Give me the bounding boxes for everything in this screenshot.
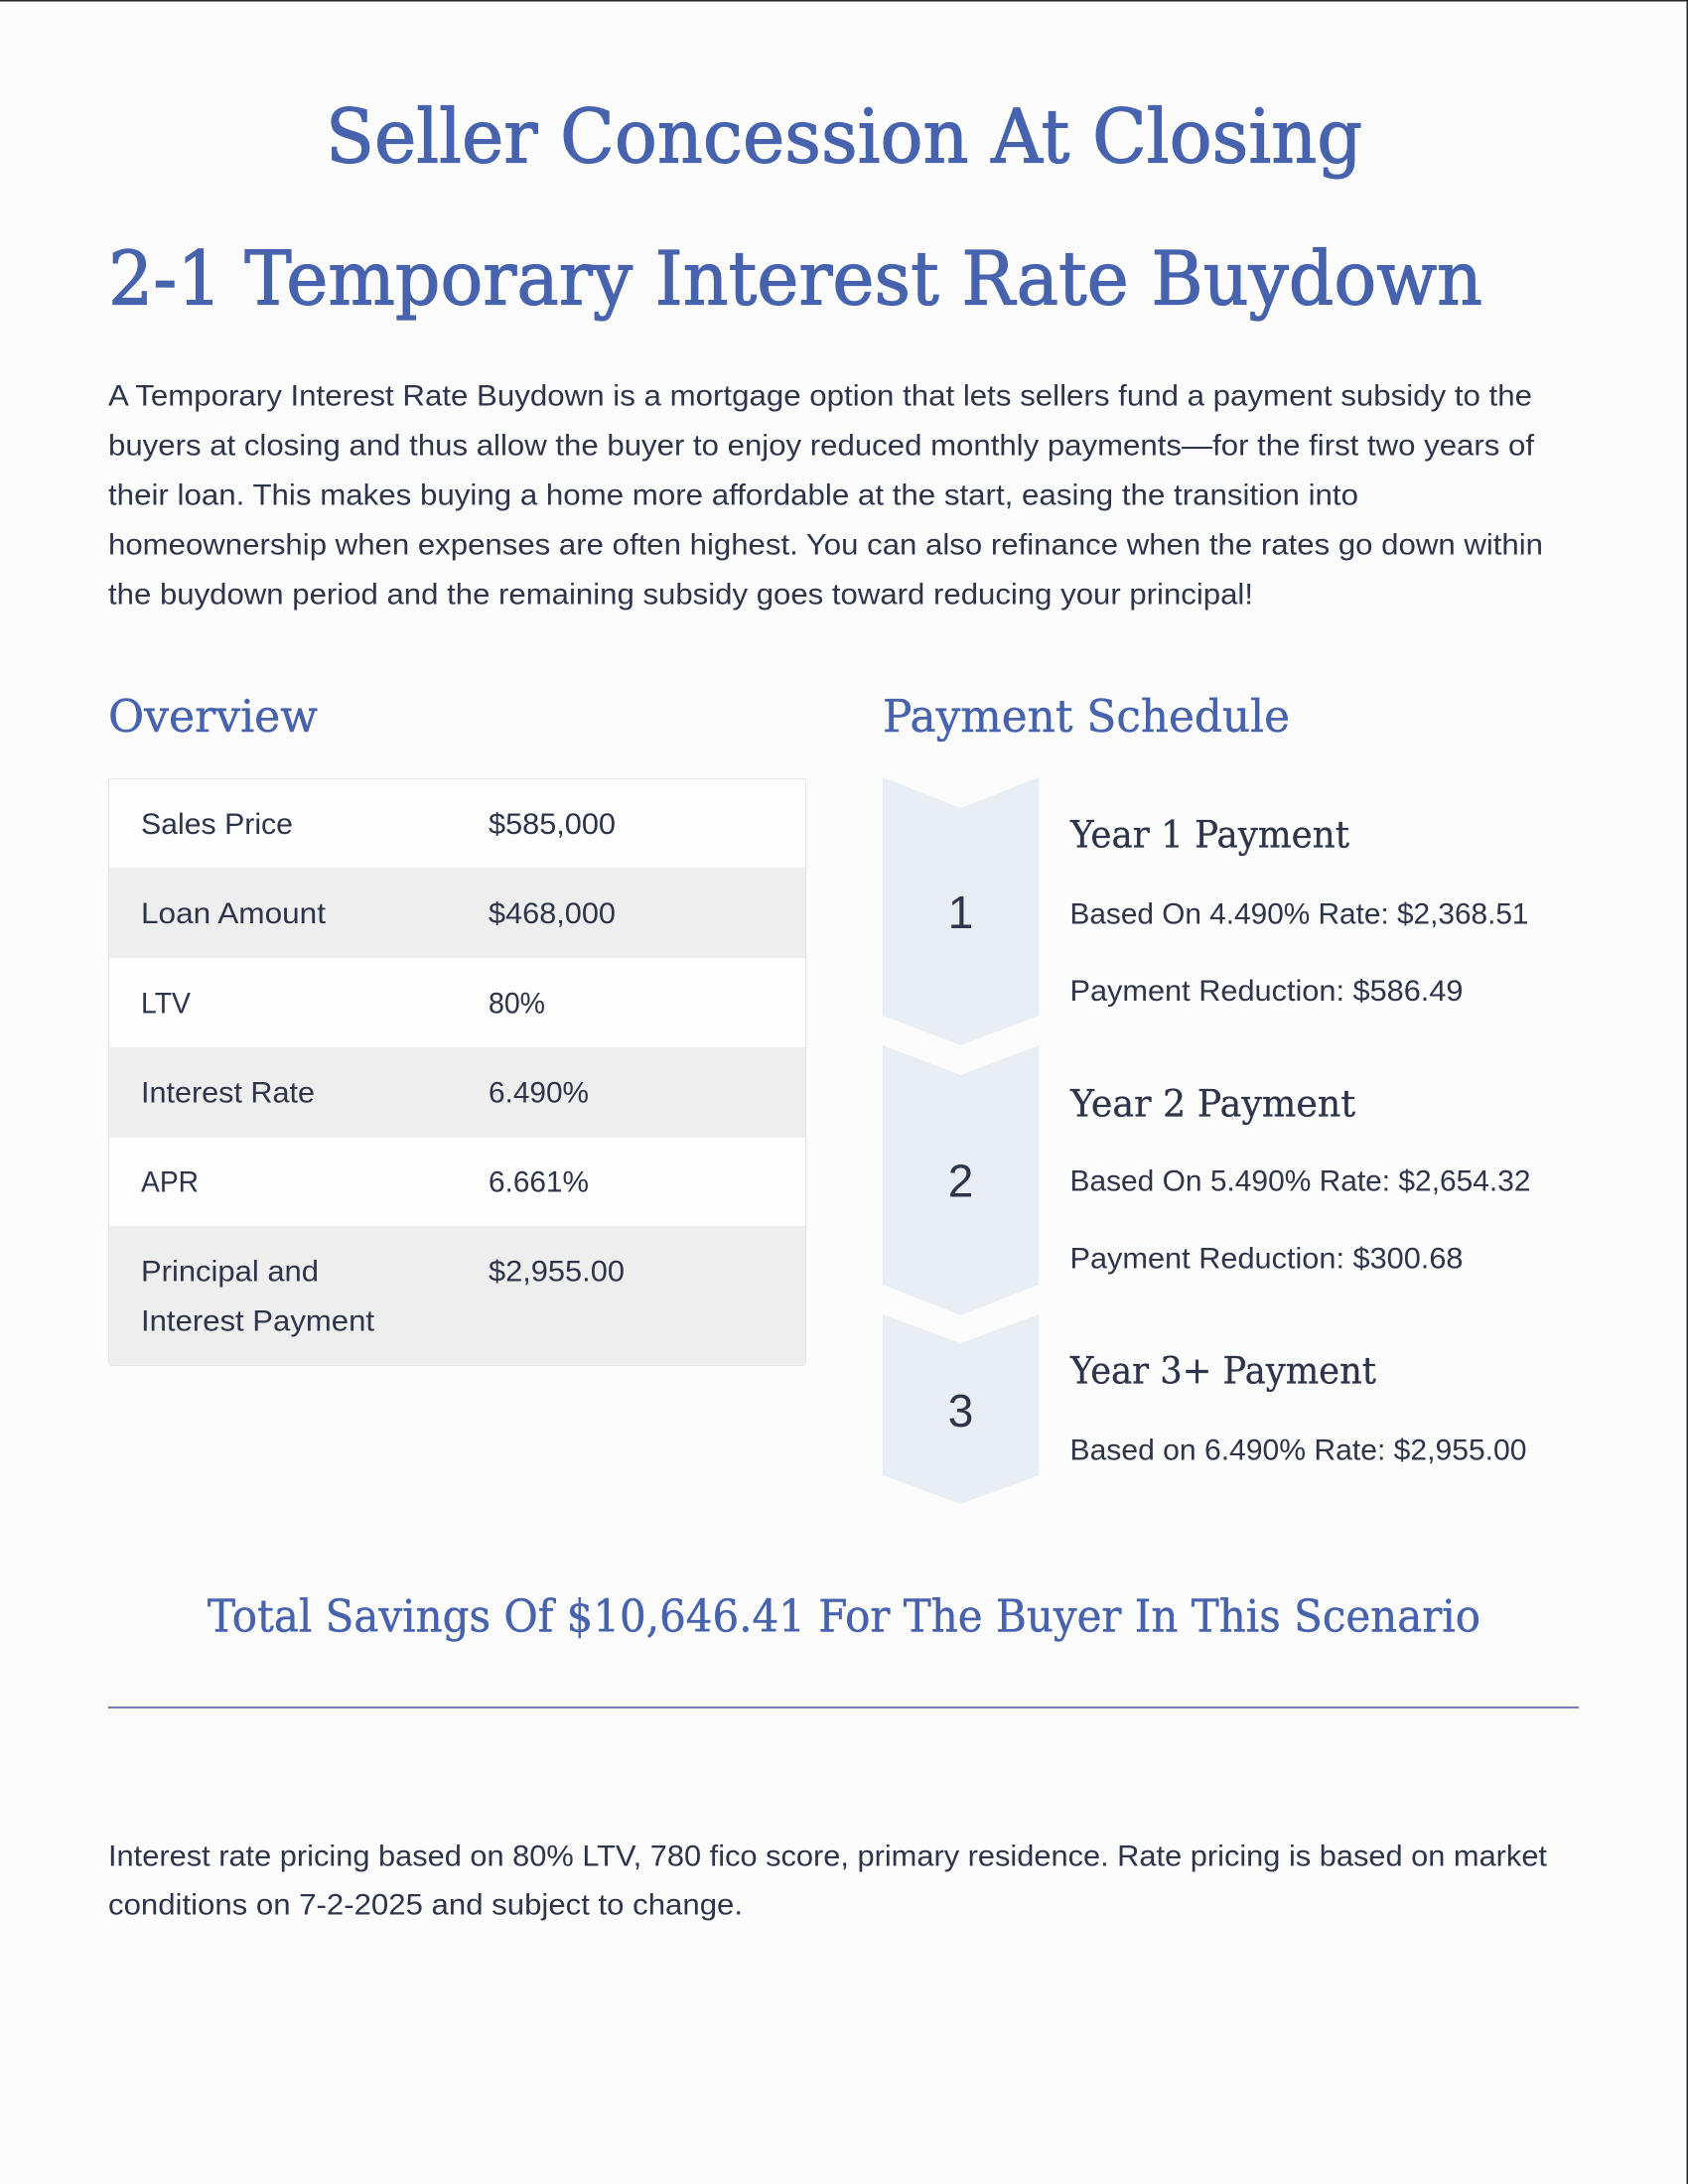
heading: overview: Overview bbox=[108, 690, 318, 743]
footnote: conditions on 7-2-2025 and subject to change. bbox=[108, 1888, 743, 1922]
row: apr: 6.661% bbox=[489, 1165, 589, 1199]
year 2 details: Payment Reduction: $300.68 bbox=[1070, 1243, 1464, 1275]
row: ltv bbox=[141, 987, 545, 1021]
number 1: 1 bbox=[948, 887, 973, 938]
title: seller concession: Seller Concession At Closing bbox=[326, 93, 1362, 181]
row: interest rate: Interest Rate bbox=[141, 1076, 315, 1110]
row: loan amount bbox=[141, 897, 616, 930]
row: apr: APR bbox=[141, 1165, 199, 1199]
year 1 details bbox=[1070, 897, 1529, 1008]
intro paragraph: homeownership when expenses are often highest. You can also refinance when the rates go down within bbox=[108, 528, 1543, 562]
chevron 1 bbox=[883, 777, 1039, 1045]
intro paragraph: buyers at closing and thus allow the buyer to enjoy reduced monthly payments—for the first two years of bbox=[108, 429, 1535, 463]
step 3: year 3+ payment bbox=[883, 1314, 1527, 1504]
year 2 details: Based On 5.490% Rate: $2,654.32 bbox=[1070, 1165, 1531, 1197]
row: sales price: $585,000 bbox=[489, 808, 616, 841]
total savings callout: Total Savings Of $10,646.41 For The Buyer In This Scenario bbox=[208, 1590, 1480, 1642]
row: loan amount: Loan Amount bbox=[141, 897, 327, 930]
row: principal and interest payment: $2,955.00 bbox=[489, 1255, 625, 1289]
row: interest rate: 6.490% bbox=[489, 1076, 589, 1110]
intro paragraph bbox=[108, 379, 1543, 612]
chevron 3 bbox=[883, 1314, 1039, 1504]
panel: overview table bbox=[109, 778, 806, 1366]
row: ltv: 80% bbox=[489, 987, 545, 1021]
row: apr bbox=[141, 1165, 589, 1199]
year 1 details: Payment Reduction: $586.49 bbox=[1070, 975, 1464, 1008]
intro paragraph: the buydown period and the remaining subsidy goes toward reducing your principal! bbox=[108, 578, 1253, 612]
row: loan amount: $468,000 bbox=[489, 897, 616, 930]
year 1 details: Based On 4.490% Rate: $2,368.51 bbox=[1070, 897, 1529, 931]
number 3: 3 bbox=[948, 1385, 973, 1436]
year 2 details bbox=[1070, 1165, 1531, 1275]
footnote: Interest rate pricing based on 80% LTV, 780 fico score, primary residence. Rate pricing is based on market bbox=[108, 1841, 1547, 1872]
year 3+ details: Based on 6.490% Rate: $2,955.00 bbox=[1070, 1433, 1527, 1467]
year 3+ heading: Year 3+ Payment bbox=[1069, 1350, 1376, 1392]
year 1 heading: Year 1 Payment bbox=[1069, 814, 1349, 856]
chevron 2 bbox=[883, 1045, 1039, 1315]
number 2: 2 bbox=[948, 1156, 973, 1207]
heading: payment schedule: Payment Schedule bbox=[883, 690, 1290, 743]
intro paragraph: A Temporary Interest Rate Buydown is a mortgage option that lets sellers fund a payment subsidy to the bbox=[108, 379, 1532, 413]
year 2 heading: Year 2 Payment bbox=[1069, 1082, 1355, 1126]
row: ltv: LTV bbox=[141, 987, 191, 1021]
row: sales price: Sales Price bbox=[141, 808, 293, 841]
step 2: year 2 payment bbox=[883, 1045, 1531, 1315]
row: sales price bbox=[141, 808, 616, 841]
row: principal and interest payment: Principal and bbox=[141, 1255, 319, 1289]
intro paragraph: their loan. This makes buying a home more affordable at the start, easing the transition into bbox=[108, 478, 1358, 512]
row: interest rate bbox=[141, 1076, 589, 1110]
title: 2-1 temporary interest rate buydown: 2-1 Temporary Interest Rate Buydown bbox=[108, 234, 1482, 322]
footnote bbox=[108, 1841, 1547, 1922]
row: principal and interest payment bbox=[141, 1255, 625, 1338]
step 1: year 1 payment bbox=[883, 777, 1529, 1045]
row: principal and interest payment: Interest Payment bbox=[141, 1304, 375, 1338]
